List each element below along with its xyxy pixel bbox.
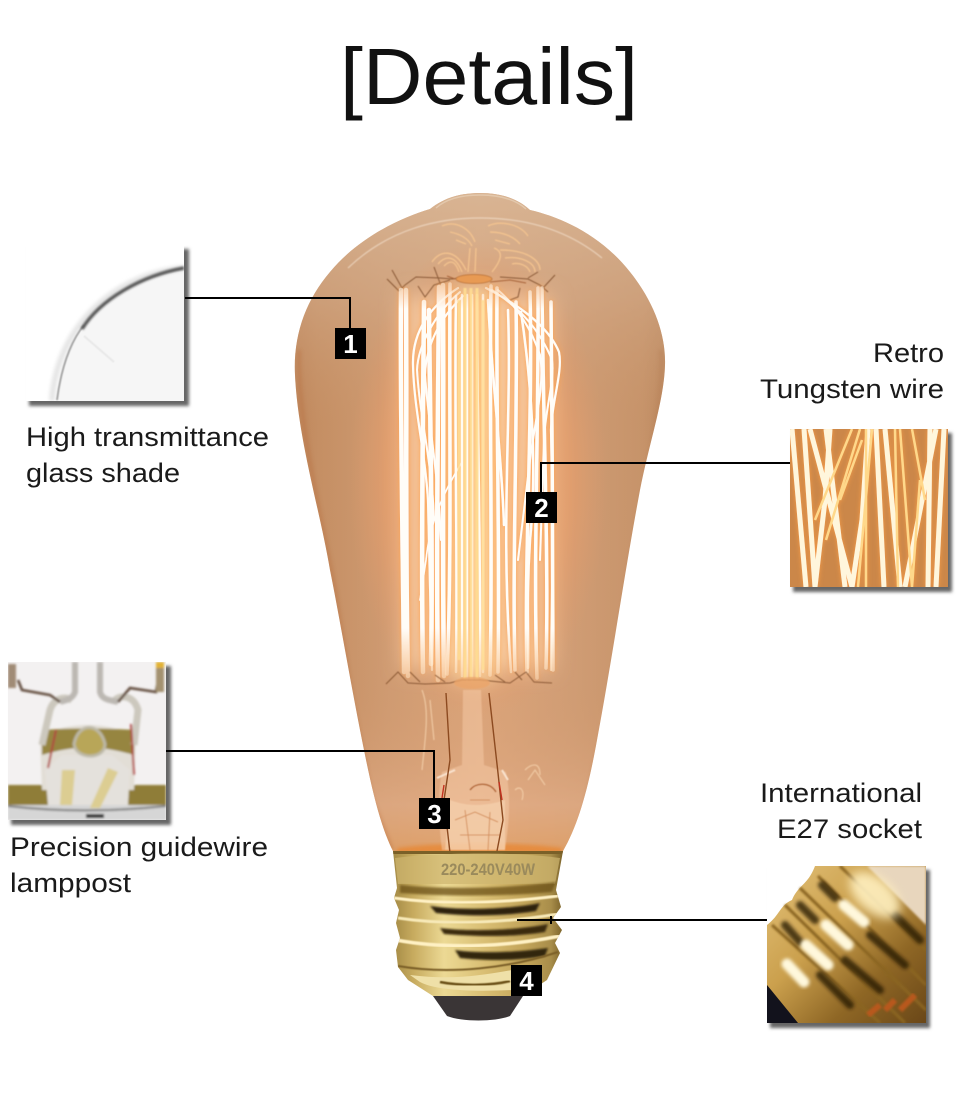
- thumbnail: tungsten wire: [790, 429, 952, 592]
- connector line 2: [541, 463, 790, 492]
- label: glass shade: High transmittance: [26, 422, 269, 452]
- label: socket: E27 socket: [777, 814, 923, 844]
- label: tungsten wire: Retro: [873, 338, 944, 368]
- thumbnail: guidewire lamppost: [8, 662, 171, 825]
- tungsten filaments: [401, 284, 560, 680]
- badge 4: [511, 965, 542, 996]
- glass stem: [437, 690, 509, 850]
- label: glass shade: [26, 422, 269, 488]
- central yellow filaments: [459, 288, 483, 680]
- bulb: [295, 193, 665, 1020]
- label: socket: [760, 778, 923, 844]
- label: tungsten wire: [760, 338, 944, 404]
- filament supports bottom: [386, 672, 552, 684]
- label: glass shade: glass shade: [26, 458, 180, 488]
- connector line 3: [166, 751, 434, 798]
- badge 3: 3: [427, 799, 442, 829]
- connector line 1: [185, 298, 350, 328]
- badge 1: [335, 328, 366, 359]
- glass reflections lower: [422, 690, 545, 800]
- lead wires: [442, 693, 503, 853]
- badge 4: 4: [519, 966, 534, 996]
- label: guidewire lamppost: lamppost: [10, 868, 132, 898]
- filament glow bands: [402, 290, 552, 680]
- socket: [393, 851, 563, 996]
- label: socket: International: [760, 778, 922, 808]
- connector line 4: [517, 916, 767, 924]
- label: guidewire lamppost: Precision guidewire: [10, 832, 268, 862]
- filament supports top: [387, 267, 555, 300]
- top filament reflections: [432, 223, 540, 272]
- badge 2: 2: [534, 493, 549, 523]
- badge 3: [419, 798, 450, 829]
- base contact: [433, 996, 523, 1020]
- title: [Details]: [340, 32, 638, 121]
- filament coil: [456, 274, 492, 284]
- thumbnail: E27 socket: [767, 863, 930, 1028]
- thumbnail: glass shade: [26, 245, 189, 406]
- socket marking: 220-240V40W: [441, 860, 536, 879]
- glass envelope: [295, 193, 665, 856]
- label: tungsten wire: Tungsten wire: [760, 374, 944, 404]
- badge 2: [526, 492, 557, 523]
- label: guidewire lamppost: [10, 832, 268, 898]
- badge 1: 1: [343, 329, 358, 359]
